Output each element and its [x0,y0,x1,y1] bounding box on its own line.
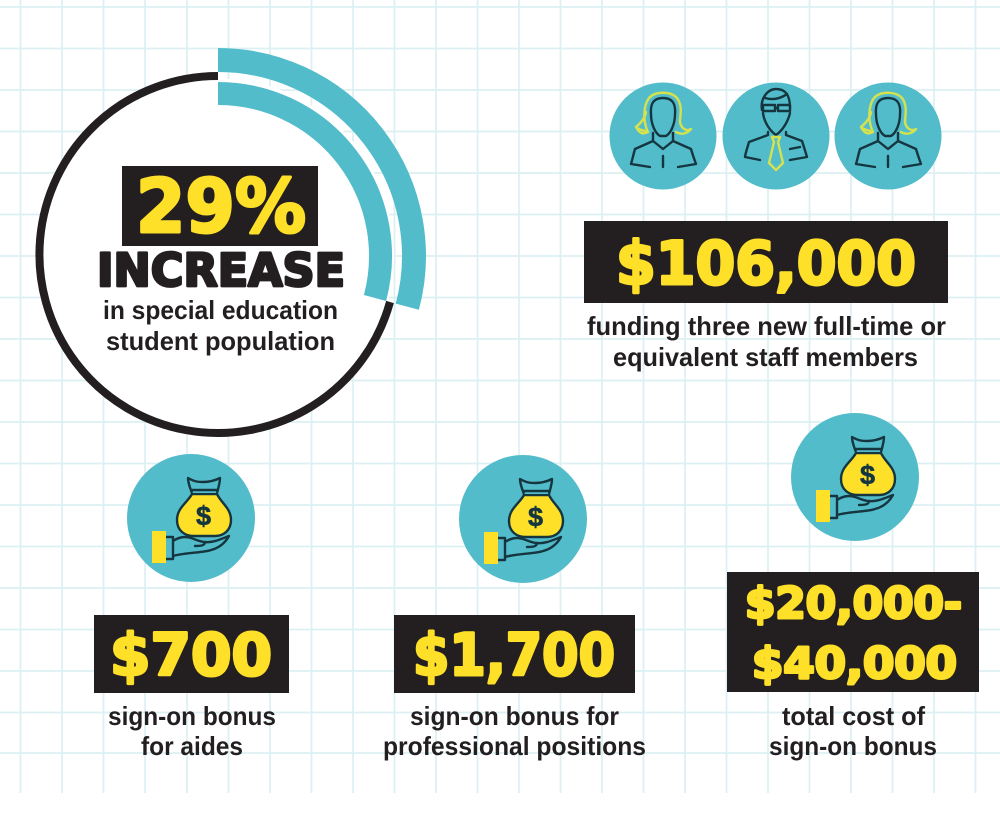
professional caption [383,701,646,761]
$106,000 figure: $106,000 [616,229,916,299]
total cost caption: total cost of [782,701,925,731]
professional caption: sign-on bonus for [410,701,619,731]
icon: hand holding money bag: $ [196,501,211,531]
aides caption: sign-on bonus [108,701,276,731]
outer teal arc [218,60,414,307]
$106,000 box [584,221,948,303]
icon: hand holding money bag [127,454,255,582]
icon: hand holding money bag: $ [528,502,543,532]
black ring arc [39,76,390,433]
total cost range figure: $40,000 [752,639,957,689]
29% label box [122,166,318,246]
ring interior [42,78,394,430]
icon: woman staff member [610,82,716,190]
icon: second woman staff member [834,82,942,190]
staff caption [587,311,946,372]
icon: hand holding money bag [459,455,587,583]
INCREASE heading: INCREASE [97,244,345,297]
inner teal arc [218,94,381,298]
29% figure: 29% [136,164,306,250]
ring caption: in special education [103,295,338,325]
$700 figure: $700 [110,621,272,689]
$700 box [94,615,289,693]
icon: hand holding money bag: $ [860,460,875,490]
icon: man staff member with tie [722,82,830,190]
panel: 29% increase ring chart [39,60,414,433]
total cost caption: sign-on bonus [769,731,937,761]
panel: aides bonus [94,454,289,761]
panel: staff funding [584,82,948,372]
total cost caption [769,701,937,761]
total cost range figure [745,579,962,689]
staff caption: funding three new full-time or [587,311,946,341]
ring caption [103,295,338,356]
total cost box [727,572,979,692]
aides caption: for aides [141,731,243,761]
aides caption [108,701,276,761]
ring caption: student population [106,326,335,356]
professional caption: professional positions [383,731,646,761]
icon: hand holding money bag [791,413,919,541]
total cost range figure: $20,000- [745,579,962,629]
$1,700 figure: $1,700 [413,621,615,689]
panel: total cost of bonus [727,413,979,761]
$1,700 box [394,615,635,693]
panel: professional positions bonus [383,455,646,761]
staff caption: equivalent staff members [613,342,918,372]
